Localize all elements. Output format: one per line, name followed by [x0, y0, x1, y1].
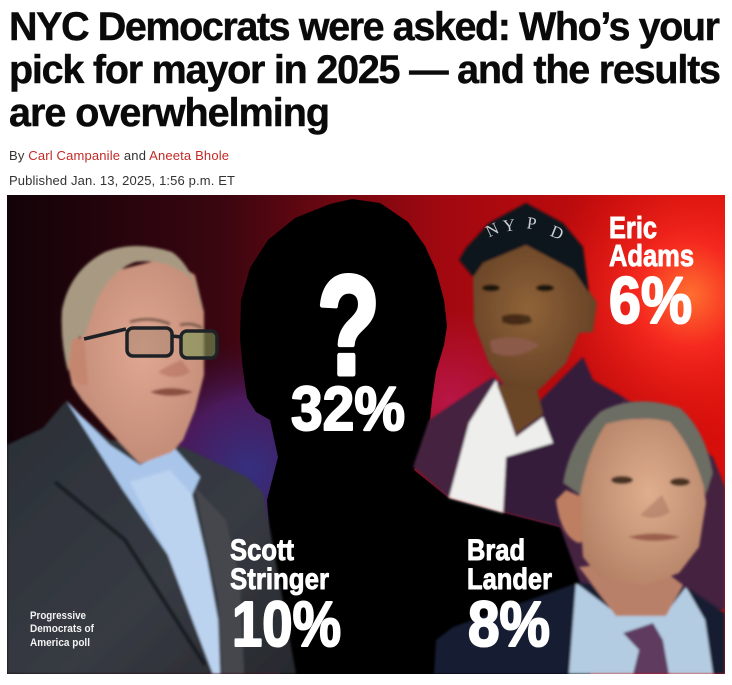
shirt	[569, 583, 713, 674]
jacket	[413, 357, 725, 610]
label: Brad Lander 8%: 8%	[468, 588, 550, 660]
neck	[497, 385, 543, 434]
label: Brad Lander 8%	[468, 538, 552, 648]
background gradient	[7, 195, 725, 674]
publish date: Published Jan. 13, 2025, 1:56 p.m. ET	[9, 173, 235, 188]
poll graphic	[7, 195, 725, 674]
label: Scott Stringer 10%: 10%	[232, 588, 341, 660]
label: unknown 32%	[291, 273, 404, 432]
label: Scott Stringer 10%: Scott	[230, 534, 294, 567]
label: unknown 32%: 32%	[291, 375, 405, 444]
label: Brad Lander 8%: Lander	[467, 563, 552, 596]
eyes and mouth	[482, 284, 500, 292]
nose	[158, 360, 190, 377]
mouth	[150, 388, 193, 396]
face	[579, 418, 706, 585]
right lapel	[195, 487, 244, 674]
cap lettering	[484, 217, 563, 238]
cap	[459, 203, 589, 293]
hair	[563, 401, 713, 495]
ear	[68, 338, 88, 385]
face	[473, 243, 597, 390]
source note: America poll	[30, 637, 90, 649]
suit jacket	[434, 583, 725, 674]
cap lettering: P	[526, 213, 538, 233]
person: Scott Stringer	[7, 246, 296, 674]
tie	[623, 623, 669, 674]
cap lettering: D	[548, 221, 566, 244]
cap lettering: N	[483, 219, 502, 241]
label: Scott Stringer 10%	[230, 538, 340, 648]
mystery candidate silhouette	[240, 199, 590, 674]
suit jacket	[7, 402, 296, 674]
source note: Democrats of	[30, 623, 94, 635]
eyes and mouth	[611, 476, 633, 484]
title: NYC Democrats were asked: Who’s your	[9, 5, 720, 49]
neck and face	[68, 258, 204, 464]
source note	[30, 610, 94, 649]
cap lettering: Y	[502, 215, 517, 236]
shirt	[65, 400, 202, 554]
label: Eric Adams 6%: 6%	[609, 263, 692, 337]
title: are overwhelming	[9, 91, 330, 135]
label: Eric Adams 6%	[609, 216, 694, 324]
lapel line	[55, 482, 205, 665]
title	[9, 5, 721, 135]
title: pick for mayor in 2025 — and the results	[9, 48, 721, 92]
ear	[556, 490, 582, 543]
neck	[579, 560, 683, 616]
label: Scott Stringer 10%: Stringer	[230, 563, 329, 596]
source note: Progressive	[30, 610, 86, 622]
shirt	[449, 380, 553, 513]
hair	[62, 246, 204, 372]
glasses	[84, 328, 217, 358]
label: Brad Lander 8%: Brad	[467, 534, 525, 567]
person: Eric Adams	[413, 203, 725, 610]
person: Brad Lander	[434, 401, 725, 674]
byline: By Carl Campanile and Aneeta Bhole	[9, 148, 229, 163]
label: Eric Adams 6%: Adams	[609, 238, 694, 273]
brow	[130, 319, 202, 328]
label: Eric Adams 6%: Eric	[609, 210, 657, 245]
label: unknown 32%: ?	[317, 246, 380, 404]
